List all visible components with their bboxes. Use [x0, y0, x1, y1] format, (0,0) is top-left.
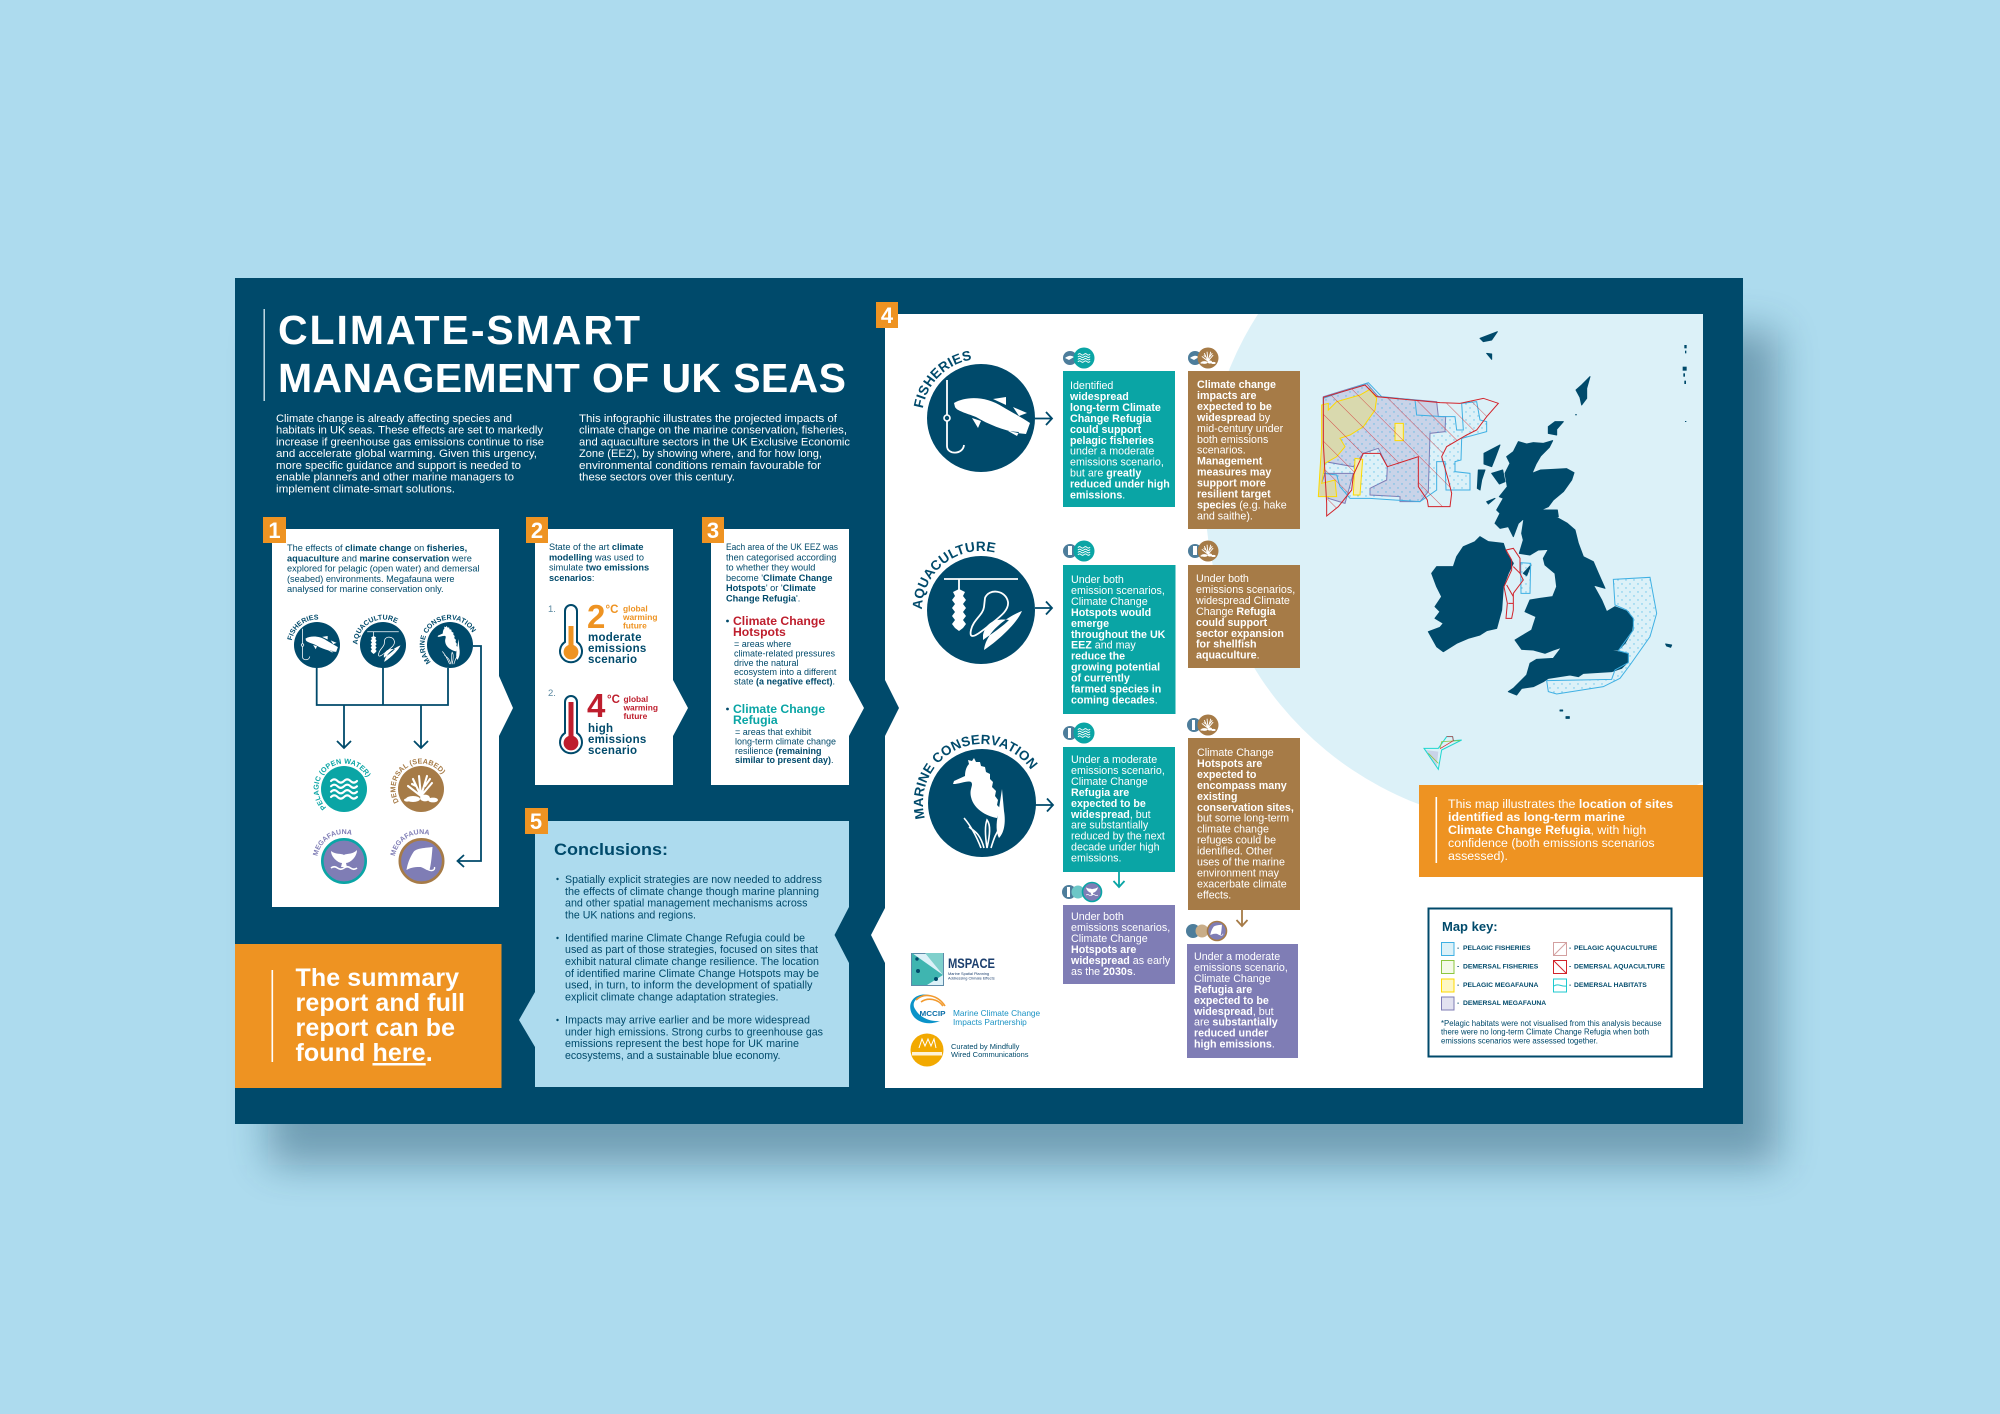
aquaculture demersal card: widespread Climate [1195, 595, 1290, 607]
scenario 2 [548, 687, 658, 757]
aquaculture demersal card [1188, 540, 1300, 668]
fisheries pelagic card: reduced under high [1070, 479, 1170, 491]
refugia definition: resilience (remaining [735, 746, 822, 756]
intro text left: habitats in UK seas. These effects are set to markedly [276, 425, 544, 437]
scenario 2: scenario [588, 745, 637, 757]
poster shadow [268, 330, 1778, 1165]
callout: map description [1419, 785, 1703, 877]
intro text left: Climate change is already affecting species and [276, 413, 512, 425]
conservation pelagic megafauna card: Hotspots are [1071, 944, 1136, 956]
refugia definition [726, 702, 836, 765]
fisheries pelagic card: emissions scenario, [1070, 457, 1164, 469]
conservation pelagic card: widespread, but [1071, 809, 1151, 821]
panel 3 text: Hotspots' or 'Climate [726, 583, 816, 593]
callout: summary report: report can be [296, 1014, 455, 1042]
conservation pelagic card: expected to be [1071, 798, 1146, 810]
refugia definition: = areas that exhibit [735, 727, 812, 737]
conservation pelagic megafauna card [1062, 882, 1175, 984]
panel 2 text: scenarios: [549, 573, 594, 583]
conservation demersal megafauna card: emissions scenario, [1194, 962, 1288, 974]
intro text right: and aquaculture sectors in the UK Exclusive Economic [579, 436, 851, 448]
panel 5: conclusions [519, 808, 849, 1087]
panel 2 text: simulate two emissions [549, 563, 649, 573]
map: far-north islets [1575, 345, 1687, 422]
refugia definition: Climate Change [733, 702, 825, 716]
conclusion 2: of identified marine Climate Change Hotspots may be [565, 968, 819, 980]
intro text right: Zone (EEZ), by showing where, and for how long, [579, 448, 822, 460]
conclusion 1: Spatially explicit strategies are now needed to address [565, 874, 823, 886]
conclusion 3: emissions represent the best hope for UK marine [565, 1038, 799, 1050]
conservation demersal card: conservation sites, [1197, 802, 1294, 814]
key: pelagic aquaculture [1554, 942, 1658, 956]
key: pelagic aquaculture: - [1569, 945, 1571, 952]
aquaculture pelagic card: emission scenarios, [1071, 585, 1165, 597]
icon: megafauna ray [390, 829, 444, 884]
conservation demersal card: uses of the marine [1197, 856, 1285, 868]
conservation pelagic card: Under a moderate [1071, 754, 1157, 766]
key: demersal habitats [1554, 979, 1647, 992]
badge 2: 2 [531, 518, 543, 543]
hotspots definition: = areas where [734, 639, 791, 649]
hotspots definition [726, 614, 837, 687]
panel 1 text: explored for pelagic (open water) and demersal [287, 564, 480, 574]
badge 1 [263, 517, 286, 543]
panel 1 text: (seabed) environments. Megafauna were [287, 574, 455, 584]
panel 1 text: The effects of climate change on fisheries, [287, 543, 467, 553]
arrow: aquaculture [1035, 602, 1052, 614]
scenario 2: future [624, 711, 648, 721]
aquaculture pelagic card: coming decades. [1071, 694, 1158, 706]
intro text left: implement climate-smart solutions. [276, 484, 455, 496]
aquaculture demersal card: Under both [1196, 573, 1249, 585]
fisheries demersal card: species (e.g. hake [1197, 499, 1287, 511]
key heading: Map key: [1442, 919, 1498, 934]
hotspots definition: Hotspots [733, 625, 786, 639]
scenario 2: 2. [548, 688, 556, 699]
fisheries demersal card: resilient target [1197, 488, 1271, 500]
panel 3 text: Change Refugia'. [726, 594, 800, 604]
hotspots definition: drive the natural [734, 658, 799, 668]
key: pelagic megafauna: - [1457, 982, 1459, 989]
fisheries demersal card: mid-century under [1197, 423, 1284, 435]
scenario 1: emissions [588, 643, 646, 655]
aquaculture pelagic card [1063, 540, 1176, 714]
scenario 1: global [623, 604, 648, 614]
intro text left: more specific guidance and support is needed to [276, 460, 521, 472]
logo: Mindfully Wired: Wired Communications [951, 1050, 1029, 1059]
conservation demersal megafauna card: Under a moderate [1194, 951, 1280, 963]
key: pelagic aquaculture: PELAGIC AQUACULTURE [1574, 945, 1658, 952]
fisheries demersal card: measures may [1197, 467, 1271, 479]
conservation pelagic card [1063, 722, 1175, 872]
aquaculture pelagic card: Hotspots would [1071, 607, 1151, 619]
scenario 2: emissions [588, 734, 646, 746]
intro text right: these sectors over this century. [579, 472, 735, 484]
intro text left: enable planners and other marine managers to [276, 472, 514, 484]
scenario 1: moderate [588, 632, 642, 644]
aquaculture demersal card: could support [1196, 617, 1268, 629]
title [264, 307, 846, 401]
conservation pelagic megafauna card: as the 2030s. [1071, 966, 1136, 978]
scenario 2: warming [622, 702, 658, 712]
badge 5: 5 [530, 809, 542, 834]
conservation demersal card: Climate Change [1197, 747, 1274, 759]
callout: summary report: found here. [296, 1039, 433, 1067]
conservation pelagic card: emissions. [1071, 853, 1121, 865]
callout: map description: Climate Change Refugia, with high [1448, 823, 1646, 837]
logo: Mindfully Wired: Curated by Mindfully [951, 1042, 1020, 1051]
conservation pelagic megafauna card: Under both [1071, 911, 1124, 923]
icon: marine conservation small: MARINE CONSERVATION [420, 614, 476, 664]
key: demersal megafauna: - [1457, 1000, 1459, 1007]
map [1318, 332, 1687, 769]
fisheries icon [914, 351, 1035, 472]
intro text left: increase if greenhouse gas emissions continue to rise [276, 436, 544, 448]
scenario 1: future [623, 620, 647, 630]
scenario 1: 2 [587, 598, 605, 635]
panel 2: scenarios [526, 517, 688, 785]
conclusion 2: exhibit natural climate change resilience. The location [565, 956, 819, 968]
conservation pelagic card: reduced by the next [1071, 831, 1165, 843]
badge 3 [702, 517, 724, 543]
conservation pelagic megafauna card: emissions scenarios, [1071, 922, 1170, 934]
conservation pelagic card: are substantially [1071, 820, 1149, 832]
fisheries pelagic card: widespread [1069, 391, 1129, 403]
conservation demersal megafauna card [1186, 922, 1298, 1058]
scenario 1: warming [622, 612, 657, 622]
key: pelagic fisheries: - [1457, 945, 1459, 952]
conclusion 3: under high emissions. Strong curbs to greenhouse gas [565, 1026, 824, 1038]
conservation pelagic card: emissions scenario, [1071, 765, 1165, 777]
map: Rockall site [1424, 737, 1462, 769]
fisheries pelagic card: Change Refugia [1070, 413, 1152, 425]
aquaculture pelagic card: reduce the [1071, 651, 1125, 663]
scenario 2: °C [607, 694, 620, 706]
hotspots definition: ecosystem into a different [734, 667, 837, 677]
scenario 2: global [624, 694, 648, 704]
key: demersal megafauna [1442, 997, 1546, 1010]
panel 3 text: to whether they would [726, 563, 815, 573]
scenario 1: 1. [548, 604, 556, 615]
key: demersal aquaculture: DEMERSAL AQUACULTURE [1574, 964, 1665, 970]
icon: megafauna whale: MEGAFAUNA [312, 829, 352, 856]
icon: fisheries small: FISHERIES [287, 614, 318, 640]
panel 3 text [726, 542, 839, 604]
scenario 1: scenario [588, 654, 637, 666]
key note: emissions scenarios were assessed together. [1441, 1036, 1598, 1045]
arrow: demersal to megafauna [1236, 910, 1248, 926]
conservation demersal card: encompass many [1197, 780, 1287, 792]
fisheries demersal card [1188, 348, 1300, 529]
conclusion 3 [556, 1015, 824, 1062]
scenario 1: °C [606, 604, 618, 616]
panel 4: sector findings and map [871, 302, 1703, 1088]
conservation demersal card: climate change [1197, 824, 1269, 836]
conclusion 2 [556, 932, 819, 1003]
poster [235, 278, 1743, 1124]
intro text left: and accelerate global warming. Given this urgency, [276, 448, 537, 460]
conservation pelagic megafauna card: Climate Change [1071, 933, 1148, 945]
aquaculture pelagic card: Climate Change [1071, 596, 1148, 608]
fisheries pelagic card: could support [1070, 424, 1142, 436]
conservation demersal card: Hotspots are [1197, 758, 1262, 770]
fisheries demersal card: both emissions [1197, 434, 1268, 446]
key: demersal fisheries: - [1457, 964, 1459, 970]
logo: MSPACE: Marine Spatial Planning [948, 971, 989, 976]
conservation pelagic card: Refugia are [1071, 787, 1129, 799]
conservation demersal megafauna card: Refugia are [1194, 984, 1252, 996]
fisheries icon: FISHERIES [914, 351, 971, 408]
key: demersal megafauna: DEMERSAL MEGAFAUNA [1463, 1000, 1546, 1007]
badge 5 [525, 808, 548, 834]
flow connectors [317, 646, 481, 867]
arrow: marine conservation [1035, 798, 1053, 812]
panel 3: hotspots and refugia [702, 517, 864, 785]
marine conservation icon: MARINE CONSERVATION [914, 734, 1038, 820]
icon: pelagic: PELAGIC (OPEN WATER) [314, 758, 371, 810]
fisheries demersal card: Climate change [1197, 379, 1276, 391]
icon: aquaculture small [352, 614, 406, 668]
panel 3 text: Each area of the UK EEZ was [726, 542, 838, 552]
badge 1: 1 [268, 518, 281, 543]
key: demersal fisheries: DEMERSAL FISHERIES [1463, 964, 1539, 970]
callout: map description: assessed). [1448, 849, 1508, 863]
panel 2 text: State of the art climate [549, 542, 644, 552]
fisheries pelagic card: but are greatly [1070, 468, 1141, 480]
key: demersal aquaculture [1554, 960, 1665, 974]
icon: aquaculture small: AQUACULTURE [352, 614, 398, 644]
fisheries demersal card: scenarios. [1197, 445, 1246, 457]
conservation pelagic card: decade under high [1071, 842, 1160, 854]
conservation demersal card: identified. Other [1197, 846, 1273, 858]
conclusion 1: the effects of climate change though marine planning [565, 886, 819, 898]
conservation demersal card [1187, 714, 1300, 910]
logo: MCCIP: Impacts Partnership [953, 1017, 1027, 1027]
conservation demersal megafauna card: widespread, but [1194, 1006, 1274, 1018]
conservation pelagic megafauna card: widespread as early [1071, 955, 1170, 967]
key: demersal aquaculture: - [1569, 964, 1571, 970]
refugia definition: similar to present day). [735, 755, 834, 765]
aquaculture pelagic card: of currently [1071, 673, 1130, 685]
conservation demersal card: exacerbate climate [1197, 878, 1287, 890]
logo: MSPACE [912, 953, 995, 986]
panel 3 text: become 'Climate Change [726, 573, 832, 583]
badge 3: 3 [707, 518, 719, 543]
conservation demersal card: refuges could be [1197, 835, 1276, 847]
callout: map description: confidence (both emissions scenarios [1448, 836, 1655, 850]
icon: megafauna ray: MEGAFAUNA [390, 829, 429, 856]
key: pelagic fisheries: PELAGIC FISHERIES [1463, 945, 1531, 952]
fisheries demersal card: support more [1197, 478, 1266, 490]
map: offshore refugia sites [1318, 383, 1498, 516]
conservation demersal card: existing [1197, 791, 1237, 803]
conservation demersal card: environment may [1197, 867, 1280, 879]
refugia definition: long-term climate change [735, 736, 836, 746]
conclusion 2: used, in turn, to inform the development of spatially [565, 980, 813, 992]
fisheries pelagic card: long-term Climate [1070, 402, 1161, 414]
aquaculture icon [912, 542, 1035, 664]
fisheries demersal card: expected to be [1197, 401, 1272, 413]
hotspots definition: state (a negative effect). [734, 677, 835, 687]
aquaculture pelagic card: EEZ and may [1071, 640, 1136, 652]
key: demersal habitats: - [1569, 982, 1571, 989]
aquaculture demersal card: Change Refugia [1196, 606, 1276, 618]
key: pelagic megafauna: PELAGIC MEGAFAUNA [1463, 982, 1539, 989]
badge 2 [526, 517, 548, 543]
aquaculture pelagic card: growing potential [1071, 662, 1160, 674]
conservation demersal card: but some long-term [1197, 813, 1289, 825]
callout: map description: identified as long-term marine [1448, 810, 1625, 824]
aquaculture icon: AQUACULTURE [912, 542, 996, 610]
conservation demersal megafauna card: Climate Change [1194, 973, 1271, 985]
scenario 2: high [588, 723, 613, 735]
aquaculture demersal card: sector expansion [1196, 628, 1284, 640]
conclusions heading: Conclusions: [554, 840, 668, 859]
fisheries pelagic card [1063, 348, 1175, 507]
icon: demersal: DEMERSAL (SEABED) [390, 758, 446, 804]
conclusion 1: the UK nations and regions. [565, 909, 696, 921]
logo: MCCIP: MCCIP [920, 1009, 946, 1018]
callout: summary report [235, 944, 502, 1088]
badge 4 [876, 302, 898, 328]
panel 1 text: analysed for marine conservation only. [287, 584, 444, 594]
logo: MCCIP: Marine Climate Change [953, 1008, 1041, 1018]
marine conservation icon [914, 734, 1038, 857]
panel 3 text: then categorised according [726, 552, 836, 562]
conservation pelagic card: Climate Change [1071, 776, 1148, 788]
intro text right [579, 413, 851, 484]
panel 1 text: aquaculture and marine conservation were [287, 553, 472, 563]
intro text left [276, 413, 544, 496]
aquaculture pelagic card: throughout the UK [1071, 629, 1166, 641]
scenario 1 [548, 598, 657, 666]
fisheries pelagic card: Identified [1070, 380, 1113, 392]
map: Great Britain and Ireland [1428, 332, 1672, 718]
conclusion 3: ecosystems, and a sustainable blue economy. [565, 1050, 780, 1062]
conclusion 2: explicit climate change adaptation strategies. [565, 991, 778, 1003]
logo: MCCIP [910, 994, 1041, 1027]
map key [1428, 908, 1672, 1056]
conclusion 1: and other spatial management mechanisms across [565, 898, 808, 910]
hotspots definition: Climate Change [733, 614, 825, 628]
panel 1: sectors [263, 517, 513, 907]
fisheries demersal card: widespread by [1197, 412, 1270, 424]
fisheries demersal card: impacts are [1197, 390, 1256, 402]
logo: Mindfully Wired [910, 1034, 1029, 1066]
conservation demersal megafauna card: reduced under [1194, 1028, 1268, 1040]
icon: fisheries small [287, 614, 340, 668]
logo: MSPACE: Addressing Climate Effects [948, 976, 995, 980]
intro text right: climate change on the marine conservation, fisheries, [579, 425, 847, 437]
conclusion 3: Impacts may arrive earlier and be more widespread [565, 1015, 810, 1027]
key note: *Pelagic habitats were not visualised from this analysis because [1441, 1019, 1662, 1028]
aquaculture demersal card: emissions scenarios, [1196, 584, 1295, 596]
aquaculture demersal card: aquaculture. [1196, 650, 1260, 662]
badge 4: 4 [881, 303, 894, 328]
conservation demersal megafauna card: high emissions. [1194, 1039, 1275, 1051]
conservation demersal card: expected to [1197, 769, 1257, 781]
callout: summary report: report and full [296, 989, 465, 1017]
aquaculture demersal card: for shellfish [1196, 639, 1257, 651]
icon: megafauna whale [312, 829, 367, 884]
intro text right: environmental conditions remain favourable for [579, 460, 821, 472]
fisheries demersal card: and saithe). [1197, 510, 1253, 522]
aquaculture pelagic card: emerge [1071, 618, 1109, 630]
logo: MSPACE: MSPACE [948, 956, 995, 971]
callout: summary report: The summary [296, 964, 459, 992]
conservation demersal card: effects. [1197, 889, 1231, 901]
aquaculture pelagic card: farmed species in [1071, 684, 1161, 696]
arrow: fisheries [1035, 412, 1052, 425]
title: MANAGEMENT OF UK SEAS [278, 355, 846, 401]
scenario 2: 4 [587, 687, 606, 724]
key: demersal habitats: DEMERSAL HABITATS [1574, 982, 1647, 989]
conservation demersal megafauna card: are substantially [1194, 1017, 1278, 1029]
map: Irish Sea and southern sites [1504, 548, 1657, 694]
conclusion 2: Identified marine Climate Change Refugia could be [565, 932, 805, 944]
fisheries pelagic card: under a moderate [1070, 446, 1154, 458]
fisheries pelagic card: emissions. [1070, 490, 1125, 502]
refugia definition: Refugia [733, 713, 778, 727]
key: pelagic fisheries [1442, 942, 1531, 956]
aquaculture pelagic card: Under both [1071, 574, 1124, 586]
conservation demersal megafauna card: expected to be [1194, 995, 1269, 1007]
key: pelagic megafauna [1442, 979, 1539, 992]
title: CLIMATE-SMART [278, 307, 640, 353]
conclusion 2: used as part of those strategies, focused on sites that [565, 944, 818, 956]
fisheries demersal card: Management [1197, 456, 1263, 468]
intro text right: This infographic illustrates the projected impacts of [579, 413, 838, 425]
key: demersal fisheries [1442, 960, 1539, 974]
hotspots definition: climate-related pressures [734, 648, 836, 658]
fisheries pelagic card: pelagic fisheries [1070, 435, 1154, 447]
panel 2 text: modelling was used to [549, 552, 644, 562]
callout: map description: This map illustrates the location of sites [1448, 797, 1673, 811]
conclusion 1 [556, 874, 823, 921]
arrow: pelagic to megafauna [1114, 872, 1124, 887]
key note: there were no long-term Climate Change Refugia when both [1441, 1028, 1649, 1037]
